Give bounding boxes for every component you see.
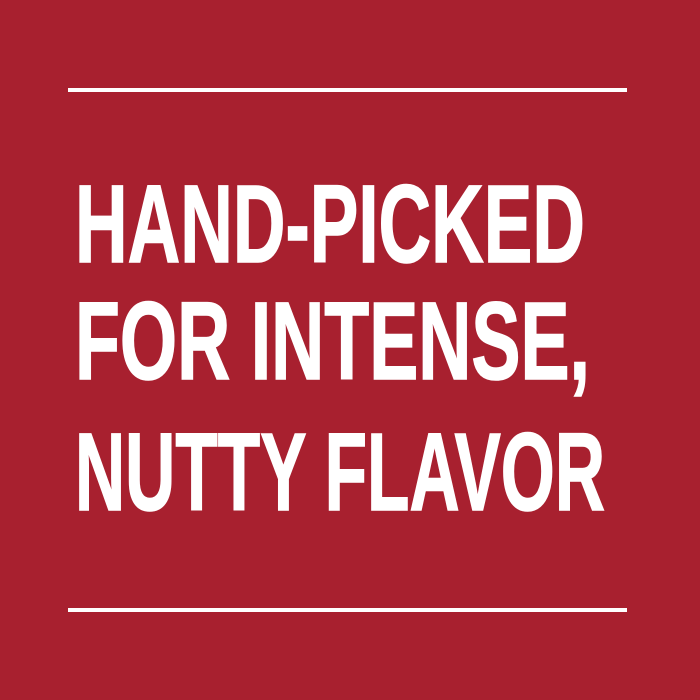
headline xyxy=(75,163,605,534)
